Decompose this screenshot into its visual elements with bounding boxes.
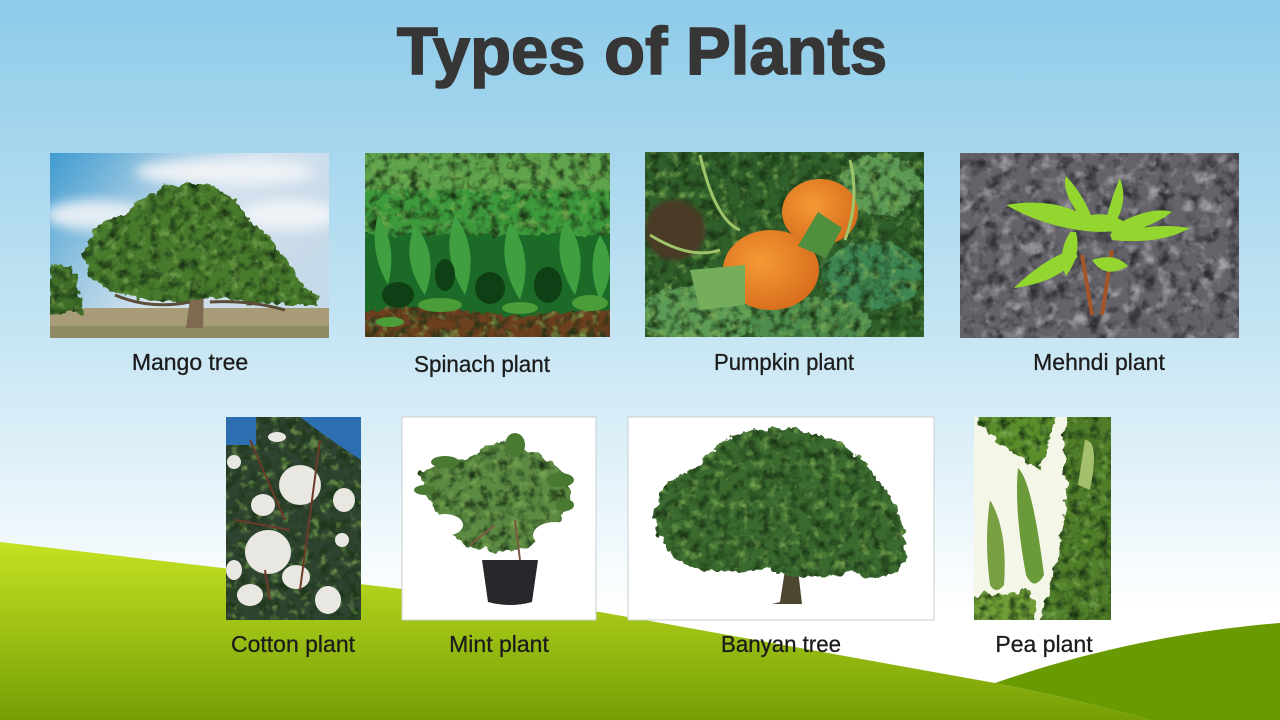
label: pea plant: Pea plant bbox=[995, 631, 1093, 657]
label: pumpkin plant: Pumpkin plant bbox=[714, 349, 855, 375]
label: cotton plant: Cotton plant bbox=[231, 631, 356, 657]
label: banyan tree: Banyan tree bbox=[721, 631, 841, 657]
photo: mint plant bbox=[402, 417, 596, 620]
photo: pea plant bbox=[974, 417, 1111, 620]
title: Types of Plants bbox=[397, 14, 887, 89]
green hill right bbox=[995, 623, 1280, 720]
photo: banyan tree bbox=[628, 417, 934, 620]
label: mint plant: Mint plant bbox=[449, 631, 549, 657]
photo: mehndi plant bbox=[960, 153, 1239, 338]
green hill left bbox=[0, 542, 1150, 720]
label: spinach plant: Spinach plant bbox=[414, 351, 551, 377]
photo: pumpkin plant bbox=[645, 152, 924, 337]
photo: spinach plant bbox=[365, 153, 610, 337]
photo: mango tree bbox=[45, 153, 340, 338]
photo: cotton plant bbox=[226, 417, 361, 620]
label: mehndi plant: Mehndi plant bbox=[1033, 349, 1165, 375]
label: mango tree: Mango tree bbox=[132, 349, 248, 375]
